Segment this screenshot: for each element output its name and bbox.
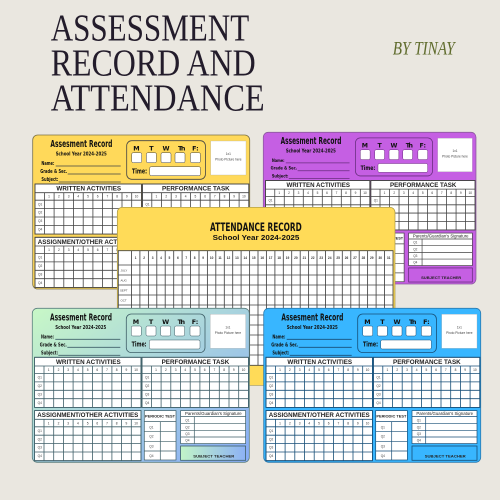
panel: green-blue gradient assessment card: Q4 bbox=[185, 438, 190, 442]
panel: blue assessment card: 1 2 3 4 5 6 7 8 9 10 bbox=[279, 421, 370, 425]
panel: purple assessment card: Q4 bbox=[413, 260, 418, 264]
attendance table: 14 bbox=[244, 256, 247, 260]
attendance table: 17 bbox=[269, 256, 273, 260]
panel: blue assessment card: Photo Picture here bbox=[446, 331, 473, 335]
attendance table: 6 bbox=[177, 256, 179, 260]
panel: yellow assessment card: Grade & Sec. bbox=[40, 169, 67, 175]
panel: blue assessment card: Grade & Sec. bbox=[271, 342, 298, 348]
attendance table: 30 bbox=[379, 256, 382, 260]
panel: green-blue gradient assessment card: School Year 2024-2025 bbox=[55, 325, 107, 331]
attendance table: 22 bbox=[311, 256, 315, 260]
attendance table: 16 bbox=[260, 256, 264, 260]
panel: green-blue gradient assessment card: Q4 bbox=[149, 454, 154, 458]
title bbox=[51, 8, 265, 119]
panel: purple assessment card: 1 2 3 4 5 6 7 8 9 10 bbox=[278, 191, 367, 195]
panel: purple assessment card: M T W Th F: bbox=[362, 143, 426, 150]
panel: green-blue gradient assessment card: Photo Picture here bbox=[215, 331, 241, 335]
panel: blue assessment card: 1 2 3 4 5 6 7 8 9 10 bbox=[387, 368, 477, 372]
attendance table: 29 bbox=[370, 256, 374, 260]
panel: purple assessment card: Photo Picture here bbox=[442, 154, 468, 158]
attendance table: 25 bbox=[336, 256, 340, 260]
panel: yellow assessment card: Assesment Record bbox=[50, 139, 112, 150]
panel: purple assessment card: 1x1 bbox=[452, 149, 458, 153]
panel: yellow assessment card: Q2 bbox=[38, 264, 42, 268]
panel: blue assessment card: Q2 bbox=[381, 434, 385, 438]
panel: yellow assessment card: ASSIGNMENT/OTHER ACTIVITIES bbox=[38, 239, 139, 246]
panel: blue assessment card: Q1 bbox=[376, 376, 381, 380]
panel: blue assessment card: Q1 bbox=[381, 425, 385, 429]
panel: purple assessment card: SUBJECT TEACHER bbox=[421, 275, 461, 280]
panel: green-blue gradient assessment card: ASSIGNMENT/OTHER ACTIVITIES bbox=[37, 412, 139, 419]
panel: blue assessment card: Q3 bbox=[376, 392, 381, 396]
panel: green-blue gradient assessment card: Q2 bbox=[145, 384, 149, 388]
panel: green-blue gradient assessment card: Q3 bbox=[38, 392, 42, 396]
panel: green-blue gradient assessment card: Grade & Sec. bbox=[40, 342, 67, 348]
panel: purple assessment card: PERFORMANCE TASK bbox=[390, 182, 457, 189]
panel: blue assessment card: Q2 bbox=[269, 437, 273, 441]
panel: yellow assessment card: Q4 bbox=[38, 281, 42, 285]
panel: yellow assessment card: Time: bbox=[132, 167, 147, 175]
panel: yellow assessment card: 1x1 bbox=[226, 152, 231, 156]
panel: yellow assessment card: Q3 bbox=[38, 272, 42, 276]
attendance table: 11 bbox=[218, 256, 222, 260]
title: RECORD AND bbox=[51, 43, 256, 85]
panel: green-blue gradient assessment card: Q3 bbox=[38, 446, 42, 450]
panel: blue assessment card: Q1 bbox=[269, 376, 273, 380]
panel: yellow assessment card: M T W Th F: bbox=[133, 144, 199, 152]
panel: green-blue gradient assessment card: 1 2 3 4 5 6 7 8 9 10 bbox=[48, 368, 138, 372]
panel: yellow assessment card: Q3 bbox=[38, 219, 42, 223]
panel: green-blue gradient assessment card: Q2 bbox=[149, 434, 154, 438]
panel: yellow assessment card bbox=[33, 135, 250, 289]
panel: green-blue gradient assessment card: Q1 bbox=[38, 429, 42, 433]
panel: purple assessment card: Time: bbox=[361, 164, 375, 172]
panel: green-blue gradient assessment card: Q4 bbox=[38, 401, 42, 405]
panel: yellow assessment card: Photo Picture here bbox=[215, 158, 242, 162]
attendance table: 2 bbox=[143, 256, 145, 260]
panel: green-blue gradient assessment card: Name: bbox=[41, 334, 54, 340]
panel: blue assessment card: Q2 bbox=[376, 384, 381, 388]
panel: green-blue gradient assessment card: Q1 bbox=[185, 418, 190, 422]
panel: green-blue gradient assessment card: WRITTEN ACTIVITIES bbox=[56, 359, 121, 366]
panel: yellow assessment card: 1 2 3 4 5 6 7 8 9 10 bbox=[48, 195, 139, 199]
panel: purple assessment card: Assesment Record bbox=[281, 136, 341, 147]
panel: purple assessment card bbox=[263, 132, 476, 284]
panel: green-blue gradient assessment card: Q2 bbox=[38, 384, 42, 388]
panel: green-blue gradient assessment card: M T W Th F: bbox=[133, 318, 198, 326]
attendance table: 31 bbox=[387, 256, 391, 260]
panel: green-blue gradient assessment card: PERFORMANCE TASK bbox=[162, 359, 230, 366]
attendance table: 24 bbox=[328, 256, 332, 260]
panel: purple assessment card: Q1 bbox=[413, 241, 418, 245]
panel: purple assessment card: Parents/Guardian's Signature bbox=[413, 233, 469, 238]
panel: green-blue gradient assessment card: Parents/Guardian's Signature bbox=[185, 411, 242, 416]
panel: blue assessment card: SUBJECT TEACHER bbox=[425, 453, 466, 458]
panel: green-blue gradient assessment card: Q1 bbox=[38, 376, 42, 380]
panel: purple assessment card: 1 2 3 4 5 6 7 8 9 10 bbox=[384, 191, 472, 195]
title: ATTENDANCE bbox=[51, 77, 265, 119]
attendance table: 23 bbox=[319, 256, 323, 260]
panel: blue assessment card: ASSIGNMENT/OTHER ACTIVITIES bbox=[269, 412, 370, 419]
panel: green-blue gradient assessment card: Q3 bbox=[149, 444, 154, 448]
attendance table: 28 bbox=[362, 256, 365, 260]
panel: blue assessment card: 1 2 3 4 5 6 7 8 9 10 bbox=[279, 368, 370, 372]
panel: yellow assessment card: Q4 bbox=[38, 228, 42, 232]
attendance table: 19 bbox=[286, 256, 289, 260]
panel: blue assessment card: Q4 bbox=[417, 438, 421, 442]
attendance table: 18 bbox=[277, 256, 281, 260]
attendance table: 7 bbox=[185, 256, 187, 260]
attendance table: 27 bbox=[353, 256, 357, 260]
panel: green-blue gradient assessment card: SUBJECT TEACHER bbox=[193, 453, 234, 458]
panel: purple assessment card: Q2 bbox=[413, 247, 418, 252]
panel: green-blue gradient assessment card: 1 2 3 4 5 6 7 8 9 10 bbox=[48, 421, 138, 425]
panel: blue assessment card: Subject: bbox=[272, 350, 289, 356]
panel: green-blue gradient assessment card: Q4 bbox=[38, 454, 42, 458]
attendance table: 3 bbox=[152, 256, 154, 260]
panel: yellow assessment card: 1 2 3 4 5 6 7 8 9 10 bbox=[48, 248, 139, 252]
panel: green-blue gradient assessment card: Q1 bbox=[145, 376, 149, 380]
attendance table: 9 bbox=[202, 256, 204, 260]
panel: blue assessment card: Q1 bbox=[417, 418, 421, 422]
panel: blue assessment card: 1x1 bbox=[457, 325, 462, 329]
attendance table: 13 bbox=[235, 256, 239, 260]
panel: blue assessment card: Q4 bbox=[376, 401, 381, 405]
attendance table: 26 bbox=[345, 256, 348, 260]
attendance table: AUG bbox=[120, 278, 128, 282]
panel: green-blue gradient assessment card: PERIODIC TEST bbox=[145, 414, 175, 418]
panel: green-blue gradient assessment card: 1x1 bbox=[225, 325, 231, 329]
panel: purple assessment card: WRITTEN ACTIVITIES bbox=[287, 182, 350, 189]
panel: blue assessment card: Q3 bbox=[381, 444, 385, 448]
attendance table: 21 bbox=[303, 256, 306, 260]
byline: BY TINAY bbox=[393, 38, 457, 59]
panel: yellow assessment card: PERFORMANCE TASK bbox=[162, 186, 230, 193]
panel: blue assessment card: Q3 bbox=[269, 446, 273, 450]
panel: yellow assessment card: WRITTEN ACTIVITIES bbox=[56, 186, 122, 193]
panel: yellow assessment card: Q1 bbox=[38, 202, 42, 206]
panel: blue assessment card: Q2 bbox=[417, 425, 421, 429]
panel: blue assessment card: Q2 bbox=[269, 384, 273, 388]
panel: blue assessment card: School Year 2024-2025 bbox=[287, 325, 338, 331]
panel: green-blue gradient assessment card: Q3 bbox=[185, 432, 190, 436]
panel: blue assessment card: Q4 bbox=[381, 454, 385, 458]
panel: blue assessment card: M T W Th F: bbox=[364, 318, 430, 326]
panel: blue assessment card: Q1 bbox=[269, 429, 273, 433]
panel: yellow assessment card: Q1 bbox=[145, 202, 150, 206]
attendance heading: ATTENDANCE RECORD bbox=[210, 220, 302, 234]
attendance table: SEPT bbox=[120, 288, 128, 292]
panel: green-blue gradient assessment card: 1 2 3 4 5 6 7 8 9 10 bbox=[155, 368, 246, 372]
attendance table: 8 bbox=[194, 256, 196, 260]
panel: green-blue gradient assessment card: Q2 bbox=[38, 437, 42, 441]
panel: purple assessment card: PERIODIC TEST bbox=[374, 237, 403, 241]
panel: blue assessment card: Q4 bbox=[269, 454, 273, 458]
attendance school year: School Year 2024-2025 bbox=[213, 233, 300, 242]
panel: green-blue gradient assessment card: Q2 bbox=[185, 425, 190, 429]
panel: green-blue gradient assessment card: Assesment Record bbox=[50, 312, 112, 323]
panel: yellow assessment card: Name: bbox=[41, 161, 54, 167]
panel: yellow assessment card: Q2 bbox=[38, 211, 42, 215]
panel: green-blue gradient assessment card: Q3 bbox=[145, 392, 149, 396]
panel: green-blue gradient assessment card bbox=[32, 308, 249, 462]
panel: yellow assessment card: Q1 bbox=[38, 256, 42, 260]
panel: yellow assessment card: 1 2 3 4 5 6 7 8 9 10 bbox=[156, 195, 246, 199]
attendance table: JULY bbox=[120, 268, 127, 272]
panel: green-blue gradient assessment card: Time: bbox=[132, 341, 147, 349]
panel: purple assessment card: Q3 bbox=[413, 254, 418, 258]
panel: purple assessment card: Q1 bbox=[268, 199, 273, 203]
panel: purple assessment card: Name: bbox=[272, 158, 285, 164]
panel: green-blue gradient assessment card: Q4 bbox=[145, 401, 149, 405]
panel: blue assessment card bbox=[264, 308, 481, 462]
attendance table: 5 bbox=[169, 256, 171, 260]
panel: purple assessment card: Subject: bbox=[272, 174, 289, 180]
panel: attendance record card bbox=[117, 207, 395, 385]
panel: purple assessment card: Q1 bbox=[374, 199, 378, 203]
panel: blue assessment card: WRITTEN ACTIVITIES bbox=[287, 359, 353, 366]
panel: blue assessment card: Assesment Record bbox=[281, 312, 343, 323]
panel: green-blue gradient assessment card: Q1 bbox=[149, 425, 154, 429]
panel: yellow assessment card: Subject: bbox=[41, 177, 58, 183]
panel: purple assessment card: School Year 2024-2025 bbox=[286, 148, 336, 154]
panel: blue assessment card: Q3 bbox=[417, 432, 421, 436]
panel: purple assessment card: Grade & Sec. bbox=[271, 166, 297, 172]
title: ASSESSMENT bbox=[51, 8, 249, 50]
panel: green-blue gradient assessment card: Subject: bbox=[41, 350, 58, 356]
panel: blue assessment card: Time: bbox=[363, 341, 378, 349]
panel: blue assessment card: Name: bbox=[272, 334, 285, 340]
attendance table: 10 bbox=[210, 256, 214, 260]
panel: blue assessment card: Parents/Guardian's Signature bbox=[416, 411, 474, 416]
panel: blue assessment card: Q4 bbox=[269, 401, 273, 405]
panel: blue assessment card: PERIODIC TEST bbox=[376, 414, 406, 418]
attendance table: 15 bbox=[252, 256, 256, 260]
attendance table: 12 bbox=[227, 256, 230, 260]
attendance table: 1 bbox=[135, 256, 137, 260]
panel: yellow assessment card: School Year 2024-2025 bbox=[56, 152, 107, 158]
attendance table: 4 bbox=[160, 256, 162, 260]
attendance table bbox=[118, 251, 393, 365]
panel: blue assessment card: Q3 bbox=[269, 392, 273, 396]
panel: blue assessment card: PERFORMANCE TASK bbox=[393, 359, 461, 366]
attendance table: OCT bbox=[120, 298, 127, 302]
attendance table: 20 bbox=[294, 256, 298, 260]
